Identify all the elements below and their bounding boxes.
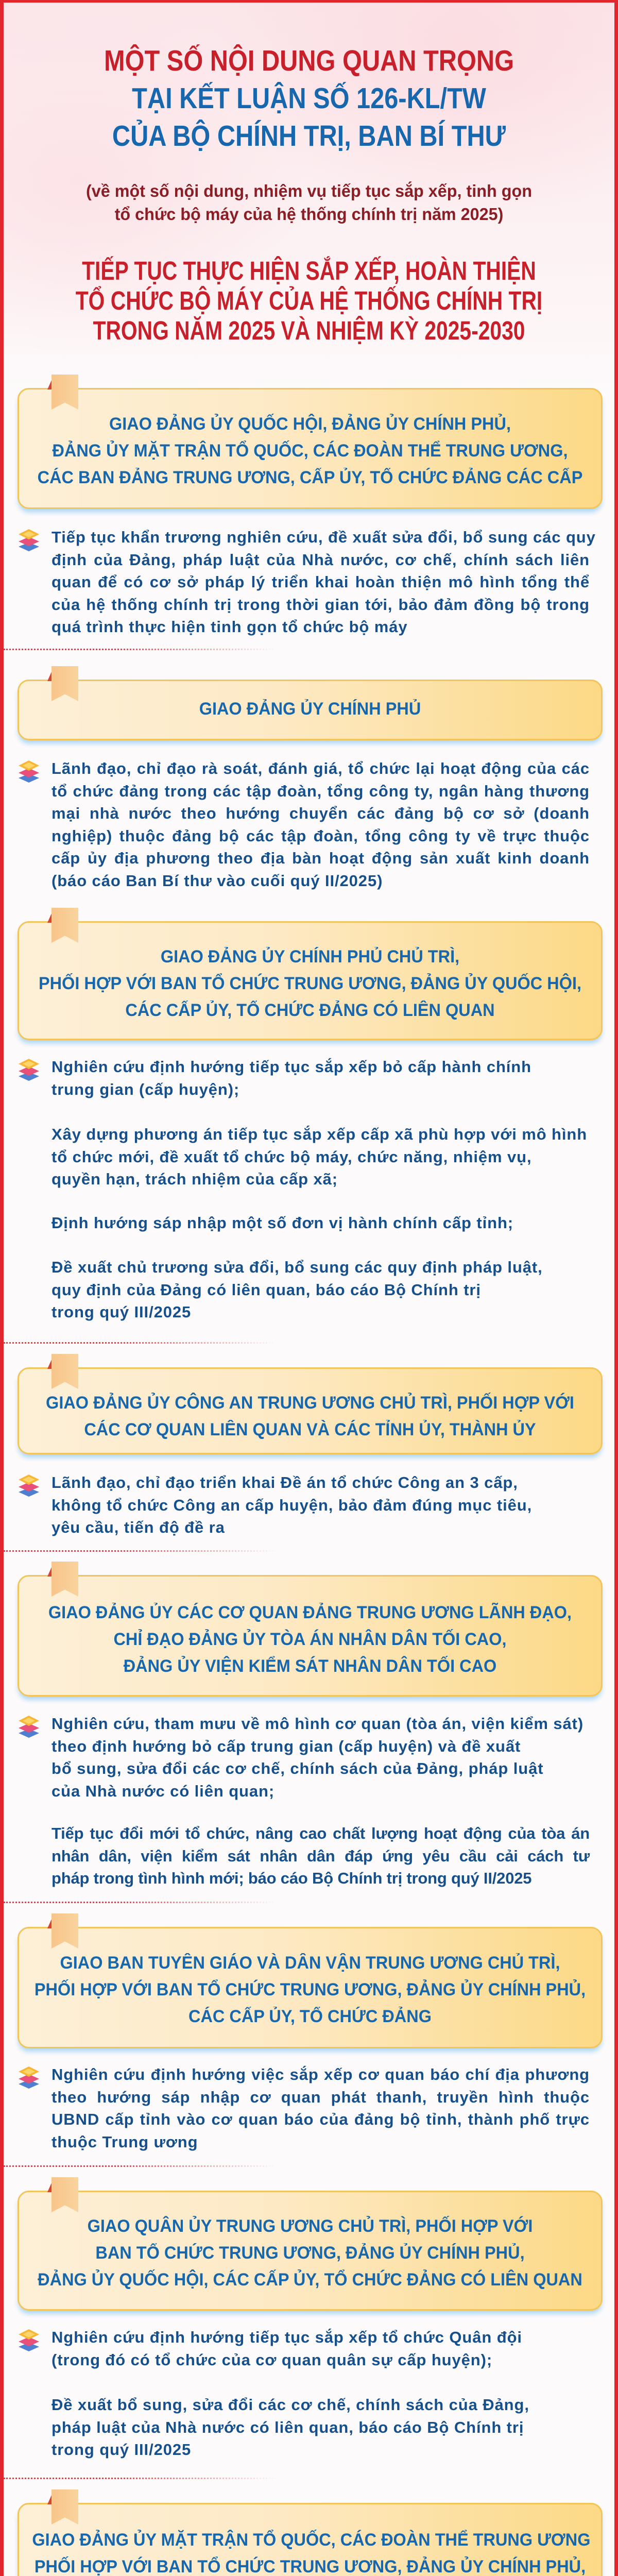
bullet 2: tổ chức đảng trong các tập đoàn, tổng công ty, ngân hàng thương bbox=[52, 782, 590, 800]
box heading 4: GIAO ĐẢNG ỦY CÔNG AN TRUNG ƯƠNG CHỦ TRÌ, PHỐI HỢP VỚI bbox=[46, 1393, 574, 1413]
box heading 6: CÁC CẤP ỦY, TỔ CHỨC ĐẢNG bbox=[188, 2007, 432, 2026]
bullet 2: (báo cáo Ban Bí thư vào cuối quý II/2025) bbox=[52, 872, 383, 889]
subtitle bbox=[86, 181, 532, 224]
bullet 5: Tiếp tục đổi mới tổ chức, nâng cao chất lượng hoạt động của tòa án bbox=[52, 1824, 590, 1842]
bullet 3: quy định của Đảng có liên quan, báo cáo Bộ Chính trị bbox=[52, 1281, 481, 1298]
bullet 2: Lãnh đạo, chỉ đạo rà soát, đánh giá, tổ chức lại hoạt động của các bbox=[52, 759, 590, 777]
box heading 8 bbox=[32, 2530, 590, 2576]
bullet 3: Xây dựng phương án tiếp tục sắp xếp cấp xã phù hợp với mô hình bbox=[52, 1125, 587, 1143]
box heading 3: CÁC CẤP ỦY, TỔ CHỨC ĐẢNG CÓ LIÊN QUAN bbox=[125, 1001, 495, 1020]
bullet 3: Nghiên cứu định hướng tiếp tục sắp xếp bỏ cấp hành chính bbox=[52, 1058, 531, 1076]
box heading 7: BAN TỔ CHỨC TRUNG ƯƠNG, ĐẢNG ỦY CHÍNH PHỦ, bbox=[95, 2243, 525, 2263]
bullet 3: trung gian (cấp huyện); bbox=[52, 1080, 239, 1098]
bullet 7: Đề xuất bổ sung, sửa đổi các cơ chế, chính sách của Đảng, bbox=[52, 2396, 529, 2414]
box heading 7: ĐẢNG ỦY QUỐC HỘI, CÁC CẤP ỦY, TỔ CHỨC ĐẢNG CÓ LIÊN QUAN bbox=[38, 2270, 582, 2290]
panel: box 6 bbox=[18, 1927, 603, 2048]
bullet 6: UBND cấp tỉnh vào cơ quan báo của đảng bộ tỉnh, thành phố trực bbox=[52, 2110, 590, 2128]
icon: layers bbox=[19, 2066, 39, 2089]
bullet 2: mại nhà nước theo hướng chuyển các đảng bộ cơ sở (doanh bbox=[52, 804, 590, 822]
icon: layers bbox=[19, 529, 39, 551]
bullet 5 bbox=[19, 1715, 590, 1887]
bullet 1: định của Đảng, pháp luật của Nhà nước, cơ chế, chính sách liên bbox=[52, 550, 590, 569]
bullet 1: của hệ thống chính trị trong thời gian tới, bảo đảm đồng bộ trong bbox=[52, 596, 590, 613]
bullet 2: nghiệp) thuộc đảng bộ các tập đoàn, tổng công ty về trực thuộc bbox=[52, 826, 590, 845]
subtitle: tổ chức bộ máy của hệ thống chính trị năm 2025) bbox=[115, 205, 503, 224]
box heading 7: GIAO QUÂN ỦY TRUNG ƯƠNG CHỦ TRÌ, PHỐI HỢP VỚI bbox=[88, 2216, 533, 2236]
box heading 1: GIAO ĐẢNG ỦY QUỐC HỘI, ĐẢNG ỦY CHÍNH PHỦ, bbox=[109, 414, 511, 434]
icon: layers bbox=[19, 1475, 39, 1497]
panel: box 1 bbox=[18, 388, 603, 509]
bullet 7: (trong đó có tổ chức của cơ quan quân sự cấp huyện); bbox=[52, 2350, 492, 2369]
icon: layers bbox=[19, 2329, 39, 2351]
box heading 1: ĐẢNG ỦY MẶT TRẬN TỔ QUỐC, CÁC ĐOÀN THỂ TRUNG ƯƠNG, bbox=[52, 441, 568, 461]
box heading 8: GIAO ĐẢNG ỦY MẶT TRẬN TỔ QUỐC, CÁC ĐOÀN THỂ TRUNG ƯƠNG bbox=[32, 2530, 590, 2550]
box heading 2: GIAO ĐẢNG ỦY CHÍNH PHỦ bbox=[199, 699, 421, 719]
bullet 5: Nghiên cứu, tham mưu về mô hình cơ quan (tòa án, viện kiểm sát) bbox=[52, 1715, 583, 1733]
title: TẠI KẾT LUẬN SỐ 126-KL/TW bbox=[132, 82, 486, 115]
box heading 1: CÁC BAN ĐẢNG TRUNG ƯƠNG, CẤP ỦY, TỔ CHỨC ĐẢNG CÁC CẤP bbox=[38, 468, 582, 487]
panel: box 4 bbox=[18, 1367, 603, 1454]
bullet 1 bbox=[19, 528, 596, 636]
bullet 1: Tiếp tục khẩn trương nghiên cứu, đề xuất sửa đổi, bổ sung các quy bbox=[52, 528, 596, 546]
box heading 4: CÁC CƠ QUAN LIÊN QUAN VÀ CÁC TỈNH ỦY, THÀNH ỦY bbox=[84, 1420, 536, 1439]
box heading 7 bbox=[38, 2216, 582, 2290]
bullet 5: bổ sung, sửa đổi các cơ chế, chính sách của Đảng, pháp luật bbox=[52, 1759, 543, 1777]
bullet 5: của Nhà nước có liên quan; bbox=[52, 1782, 274, 1800]
bullet 1: quan để có cơ sở pháp lý triển khai hoàn thiện mô hình tổng thể bbox=[52, 573, 590, 591]
box heading 4 bbox=[46, 1393, 574, 1439]
icon: layers bbox=[19, 1059, 39, 1081]
bullet 5: nhân dân, viện kiểm sát nhân dân đáp ứng yêu cầu cải cách tư bbox=[52, 1846, 590, 1865]
bullet 6: thuộc Trung ương bbox=[52, 2133, 198, 2150]
box heading 8: PHỐI HỢP VỚI BAN TỔ CHỨC TRUNG ƯƠNG, ĐẢNG ỦY CHÍNH PHỦ, bbox=[35, 2557, 586, 2576]
bullet 4: Lãnh đạo, chỉ đạo triển khai Đề án tổ chức Công an 3 cấp, bbox=[52, 1473, 518, 1492]
bullet 3: trong quý III/2025 bbox=[52, 1303, 191, 1321]
box heading 5: CHỈ ĐẠO ĐẢNG ỦY TÒA ÁN NHÂN DÂN TỐI CAO, bbox=[113, 1630, 507, 1649]
bullet 5: theo định hướng bỏ cấp trung gian (cấp huyện) và đề xuất bbox=[52, 1737, 521, 1755]
panel: box 3 bbox=[18, 921, 603, 1040]
bullet 2: cấp ủy địa phương theo địa bàn hoạt động sản xuất kinh doanh bbox=[52, 849, 590, 867]
heading: main theme: TỔ CHỨC BỘ MÁY CỦA HỆ THỐNG CHÍNH TRỊ bbox=[76, 286, 542, 315]
bullet 2 bbox=[19, 759, 590, 889]
box heading 6: PHỐI HỢP VỚI BAN TỔ CHỨC TRUNG ƯƠNG, ĐẢNG ỦY CHÍNH PHỦ, bbox=[35, 1980, 586, 1999]
bullet 5: pháp trong tình hình mới; báo cáo Bộ Chính trị trong quý II/2025 bbox=[52, 1869, 531, 1887]
bullet 3: tổ chức mới, đề xuất tổ chức bộ máy, chức năng, nhiệm vụ, bbox=[52, 1148, 531, 1165]
bullet 7 bbox=[19, 2328, 529, 2459]
bullet 3: Định hướng sáp nhập một số đơn vị hành chính cấp tỉnh; bbox=[52, 1214, 513, 1232]
bullet 6: Nghiên cứu định hướng việc sắp xếp cơ quan báo chí địa phương bbox=[52, 2065, 590, 2083]
bullet 7: Nghiên cứu định hướng tiếp tục sắp xếp tổ chức Quân đội bbox=[52, 2328, 522, 2346]
box heading 5: GIAO ĐẢNG ỦY CÁC CƠ QUAN ĐẢNG TRUNG ƯƠNG LÃNH ĐẠO, bbox=[48, 1603, 572, 1622]
bullet 3: quyền hạn, trách nhiệm của cấp xã; bbox=[52, 1170, 338, 1188]
box heading 5: ĐẢNG ỦY VIỆN KIỂM SÁT NHÂN DÂN TỐI CAO bbox=[124, 1656, 496, 1676]
bullet 7: pháp luật của Nhà nước có liên quan, báo cáo Bộ Chính trị bbox=[52, 2418, 524, 2436]
heading: main theme: TRONG NĂM 2025 VÀ NHIỆM KỲ 2025-2030 bbox=[93, 316, 525, 345]
title: MỘT SỐ NỘI DUNG QUAN TRỌNG bbox=[104, 44, 514, 77]
bullet 4 bbox=[19, 1473, 532, 1536]
box heading 6: GIAO BAN TUYÊN GIÁO VÀ DÂN VẬN TRUNG ƯƠNG CHỦ TRÌ, bbox=[60, 1953, 560, 1973]
icon: layers bbox=[19, 760, 39, 783]
title bbox=[104, 44, 514, 152]
box heading 1 bbox=[38, 414, 582, 487]
box heading 3: GIAO ĐẢNG ỦY CHÍNH PHỦ CHỦ TRÌ, bbox=[161, 947, 459, 967]
box heading 5 bbox=[48, 1603, 572, 1676]
panel: box 5 bbox=[18, 1575, 603, 1697]
box heading 3: PHỐI HỢP VỚI BAN TỔ CHỨC TRUNG ƯƠNG, ĐẢNG ỦY QUỐC HỘI, bbox=[39, 974, 581, 993]
box heading 3 bbox=[39, 947, 581, 1020]
panel: box 7 bbox=[18, 2191, 603, 2311]
heading: main theme bbox=[76, 256, 542, 345]
box heading 6 bbox=[35, 1953, 586, 2026]
title: CỦA BỘ CHÍNH TRỊ, BAN BÍ THƯ bbox=[112, 120, 506, 152]
bullet 3 bbox=[19, 1058, 587, 1321]
bullet 7: trong quý III/2025 bbox=[52, 2441, 191, 2459]
bullet 4: yêu cầu, tiến độ đề ra bbox=[52, 1518, 225, 1536]
icon: layers bbox=[19, 1716, 39, 1738]
panel: box 2 bbox=[18, 680, 603, 740]
panel: box 8 bbox=[18, 2503, 603, 2576]
heading: main theme: TIẾP TỤC THỰC HIỆN SẮP XẾP, HOÀN THIỆN bbox=[82, 256, 536, 285]
bullet 6: theo hướng sáp nhập cơ quan phát thanh, truyền hình thuộc bbox=[52, 2088, 590, 2106]
bullet 4: không tổ chức Công an cấp huyện, bảo đảm đúng mục tiêu, bbox=[52, 1496, 532, 1514]
bullet 6 bbox=[19, 2065, 590, 2150]
bullet 1: quá trình thực hiện tinh gọn tổ chức bộ máy bbox=[52, 618, 408, 636]
subtitle: (về một số nội dung, nhiệm vụ tiếp tục sắp xếp, tinh gọn bbox=[86, 181, 532, 200]
bullet 3: Đề xuất chủ trương sửa đổi, bổ sung các quy định pháp luật, bbox=[52, 1258, 543, 1276]
